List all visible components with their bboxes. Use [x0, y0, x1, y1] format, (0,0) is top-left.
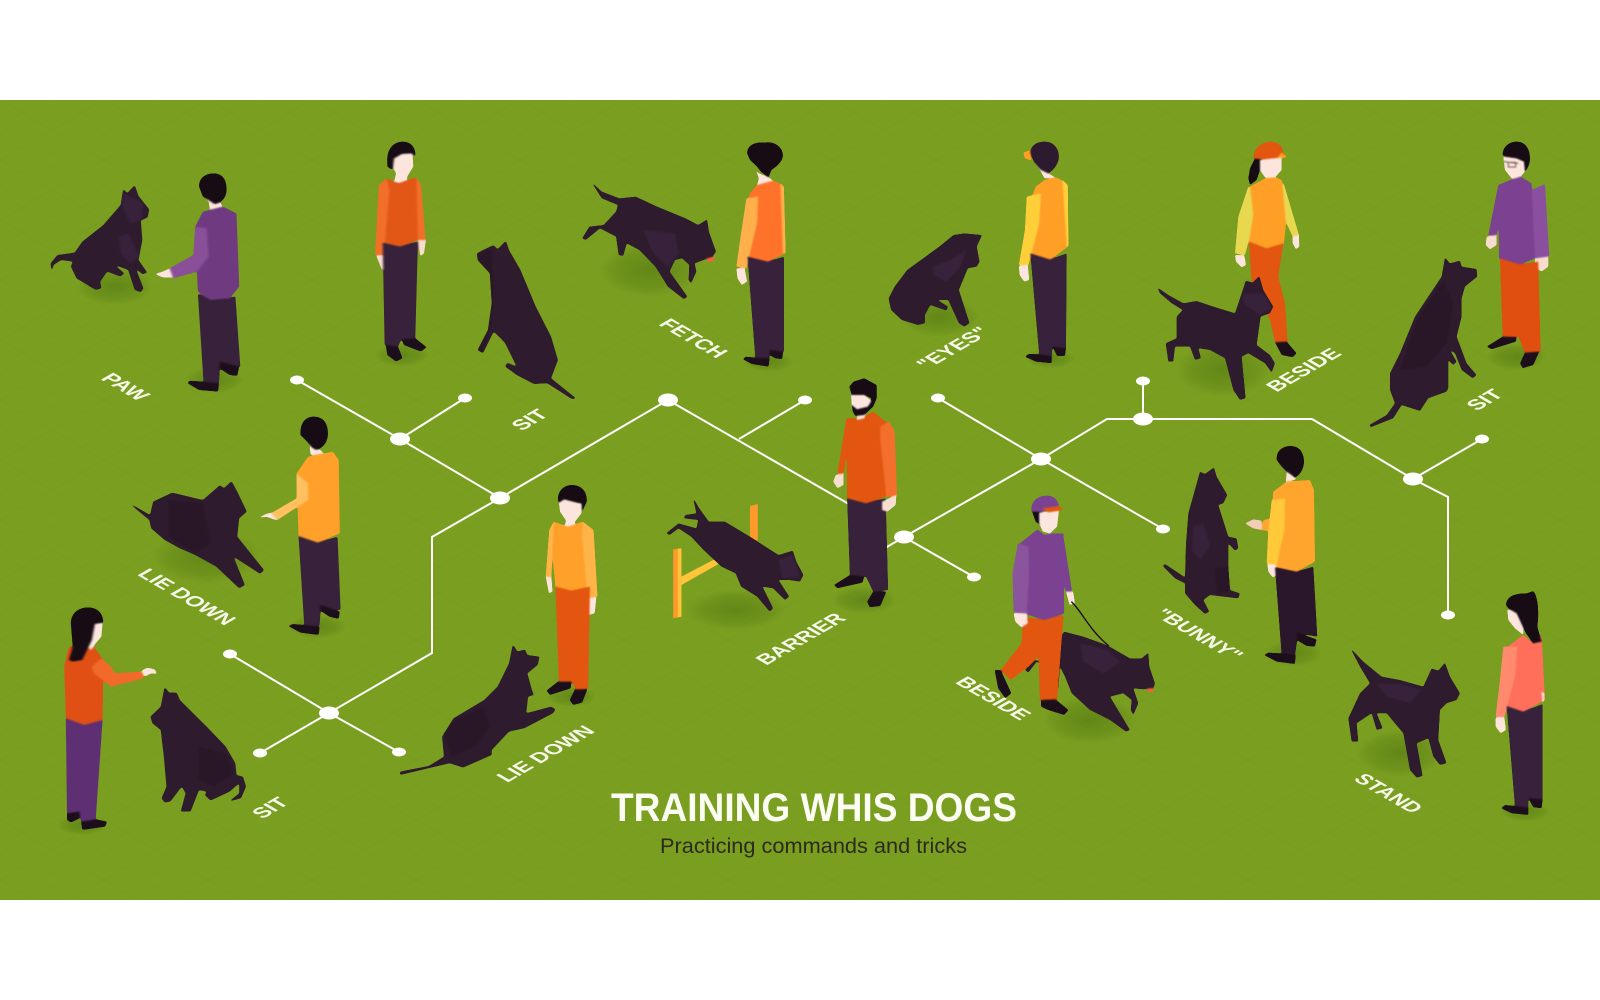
dog: stand	[1348, 648, 1460, 778]
person: orange vest woman, back view	[736, 142, 793, 372]
person: yellow vest with cap, back view	[1019, 142, 1075, 368]
person: yellow shirt and orange pants, front view	[546, 485, 597, 707]
label: LIE DOWN left: LIE DOWN	[132, 566, 241, 628]
panel: green field	[0, 100, 1600, 900]
person: yellow shirt, back view, hand out	[1245, 446, 1322, 667]
person: orange shirt, front view	[375, 142, 429, 367]
label: BUNNY: "BUNNY"	[1149, 606, 1248, 663]
person: woman with orange cap, walking	[1235, 142, 1299, 357]
person: purple shirt man with glasses	[1486, 142, 1549, 370]
dog: beside, on leash	[1025, 632, 1155, 743]
dog: sit, looking left	[477, 241, 576, 399]
icon: jump barrier	[673, 504, 758, 618]
dog: beside, walking	[1157, 276, 1275, 400]
dog: sit, bottom left	[150, 687, 246, 812]
label: PAW: PAW	[95, 370, 155, 404]
subtitle: Practicing commands and tricks	[660, 835, 967, 858]
dog: lie down, left	[127, 481, 264, 588]
person: woman in coral shirt, back view	[1496, 591, 1550, 822]
label: BESIDE upper: BESIDE	[1261, 345, 1347, 395]
label: EYES: "EYES"	[911, 324, 996, 372]
label: SIT right: SIT	[1461, 386, 1509, 414]
person: purple shirt, back view	[155, 173, 243, 393]
person: yellow-orange shirt pointing at dog	[257, 417, 346, 638]
person: bearded man in orange shirt	[832, 378, 897, 613]
flowchart connector lines and nodes	[223, 376, 1489, 758]
dog: sit, looking right	[1369, 257, 1477, 427]
label: FETCH: FETCH	[653, 316, 733, 361]
label: LIE DOWN centre: LIE DOWN	[492, 723, 600, 785]
dog: lie down, looking up right	[400, 644, 556, 775]
dog: paw	[51, 185, 153, 305]
dog: bunny, sitting up	[1163, 467, 1240, 614]
label: SIT: SIT	[506, 406, 554, 434]
label: STAND: STAND	[1348, 770, 1428, 817]
dog: jumping over barrier	[666, 497, 804, 630]
label: BESIDE lower: BESIDE	[950, 674, 1036, 723]
dog: fetch, running	[582, 182, 716, 299]
person: woman with long hair holding treat	[57, 607, 157, 835]
title: TRAINING WHIS DOGS	[611, 786, 1017, 830]
person: purple shirt man with cap walking dog	[995, 496, 1109, 715]
dog: eyes, paw over face	[889, 233, 982, 337]
label: BARRIER: BARRIER	[751, 610, 852, 668]
label: SIT bottom left: SIT	[247, 794, 295, 822]
